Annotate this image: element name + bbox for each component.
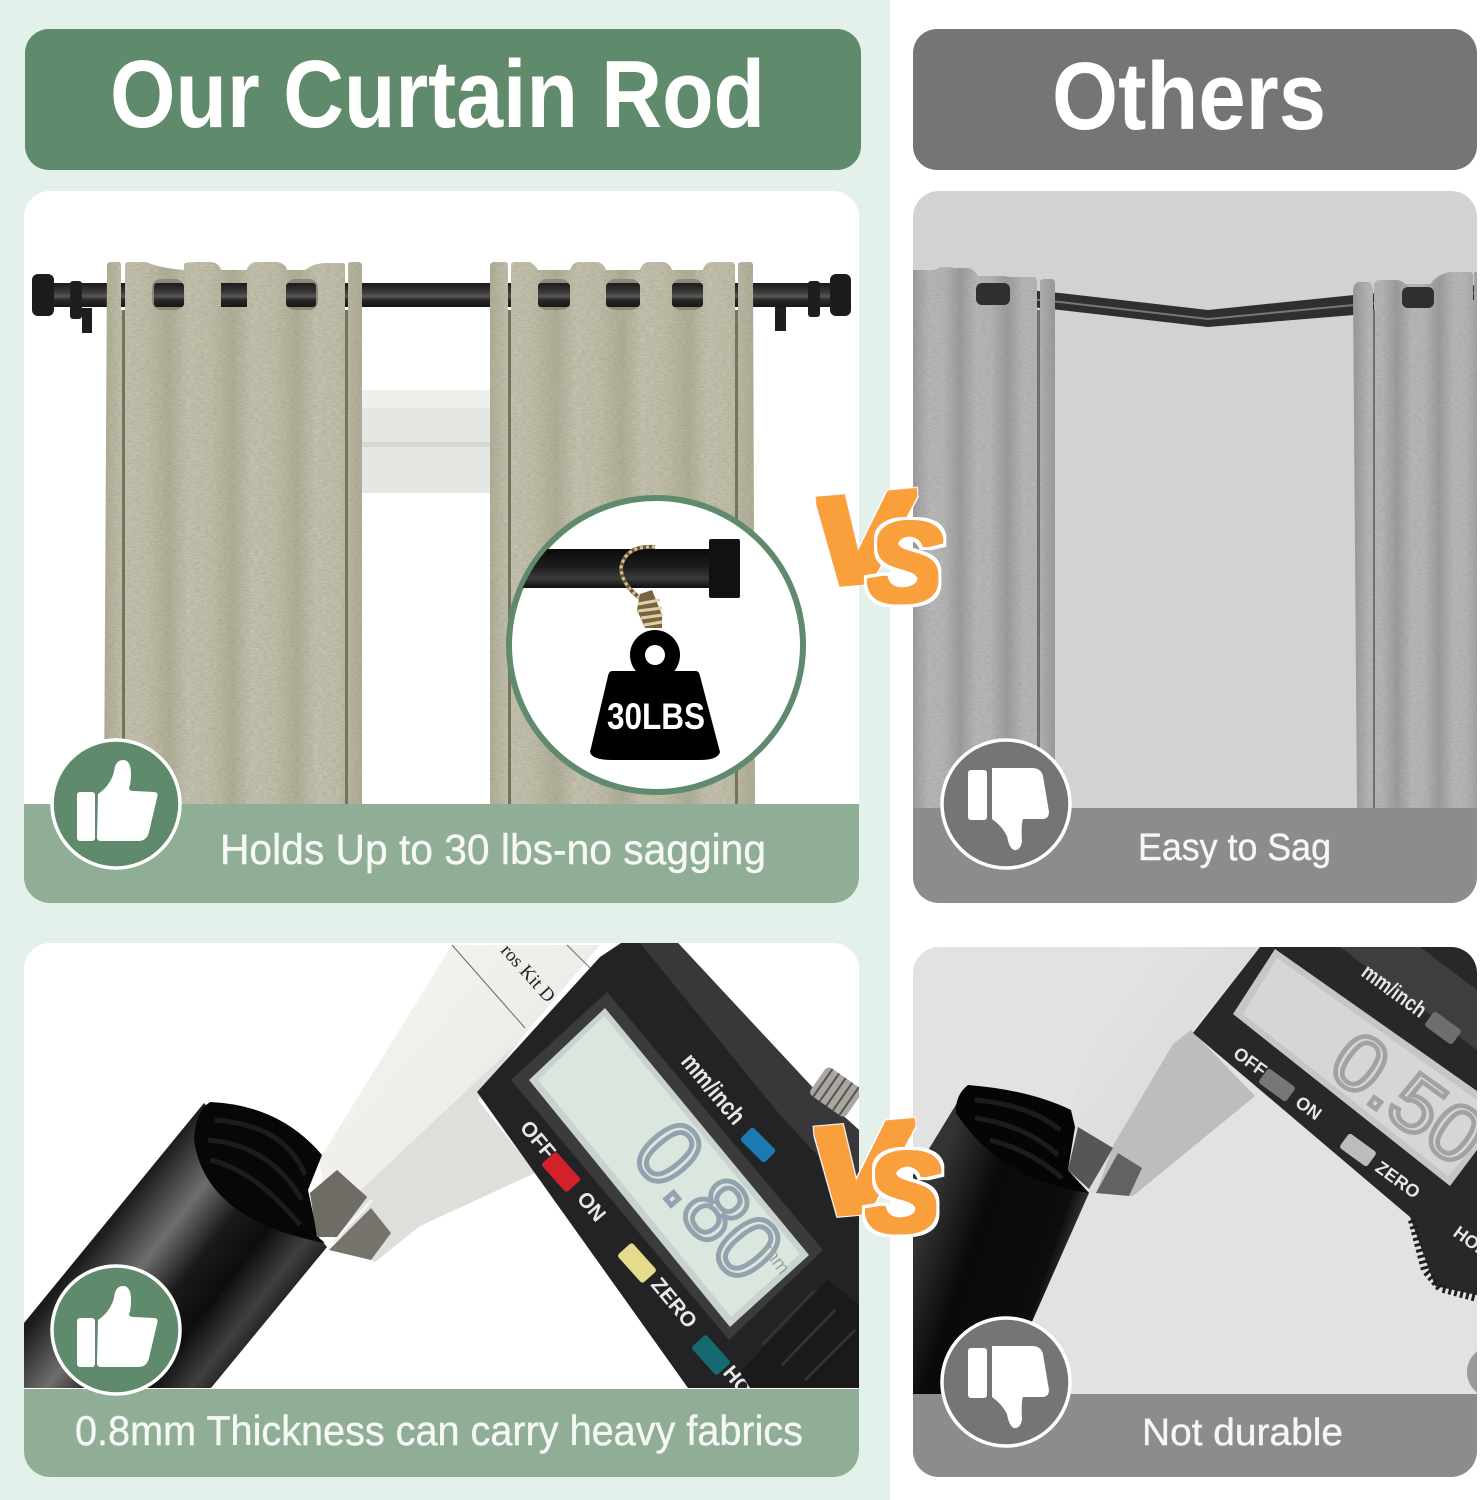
VS badge lower: V [804,1096,921,1241]
label band [24,1389,859,1477]
digital caliper body: mm/inch [1357,959,1432,1023]
left column background [0,0,890,1500]
gray curtain right [1353,272,1477,808]
icon: thumbs up 1 [52,740,180,868]
heading: Our Curtain Rod: Our Curtain Rod [110,41,765,148]
digital caliper body: 0.80 [614,1102,802,1300]
VS badge upper: V [806,466,923,611]
digital caliper body: ON [1292,1092,1325,1124]
callout: 30 LBS weight on rod [500,498,803,792]
icon: thumbs down 1 [942,740,1070,868]
label band [913,808,1477,903]
panel: others easy to sag [913,191,1477,903]
digital caliper body: OFF [1230,1043,1271,1080]
caliper jaws: ros Kit D [496,940,559,1007]
tube cross-section [24,1102,367,1388]
caliper jaws [310,940,600,1262]
tube [913,1085,1089,1394]
digital caliper body: mm [758,1241,794,1279]
label band [913,1394,1477,1477]
grayscale jaws [1068,1030,1255,1196]
grommets with rod showing through [152,279,703,310]
panel: 0.8mm thickness caliper [24,940,864,1477]
digital caliper body: OFF [515,1116,560,1164]
digital caliper body: mm/inch [675,1048,751,1130]
panel: others not durable caliper [913,947,1480,1477]
digital caliper body: ZERO [646,1273,701,1333]
panel: our rod holds 30 lbs [24,191,859,903]
digital caliper body: HOLD [718,1361,774,1422]
curtain rod [32,274,851,333]
label band [24,804,859,903]
caption: thickness: 0.8mm Thickness can carry heavy fabrics [75,1407,803,1454]
digital caliper body [1193,947,1480,1398]
VS badge upper [806,466,942,625]
digital caliper body: ON [572,1187,610,1226]
heading: Others [913,29,1477,170]
grommet right [1402,287,1434,308]
right curtain [490,262,755,804]
grommet left [976,283,1010,305]
sagging rod [1037,285,1474,327]
callout: 30 LBS weight on rod: 30LBS [607,696,705,737]
VS badge upper: S [868,500,942,625]
icon: thumbs down 2 [942,1318,1070,1446]
knurled screw [810,1067,859,1117]
gray curtain left [913,266,1055,808]
VS badge lower [804,1096,940,1255]
digital caliper body [477,943,859,1422]
heading: Our Curtain Rod [25,29,861,170]
caption: not durable: Not durable [1142,1412,1343,1454]
caption: easy to sag: Easy to Sag [1138,827,1331,869]
VS badge lower: S [866,1130,940,1255]
icon: thumbs up 2 [52,1266,180,1394]
left curtain [104,262,362,804]
window frame behind curtains [360,390,495,493]
digital caliper body: ZERO [1372,1157,1424,1203]
caption: holds up to 30 lbs: Holds Up to 30 lbs-no sagging [220,826,766,874]
heading: Others: Others [1052,43,1326,150]
